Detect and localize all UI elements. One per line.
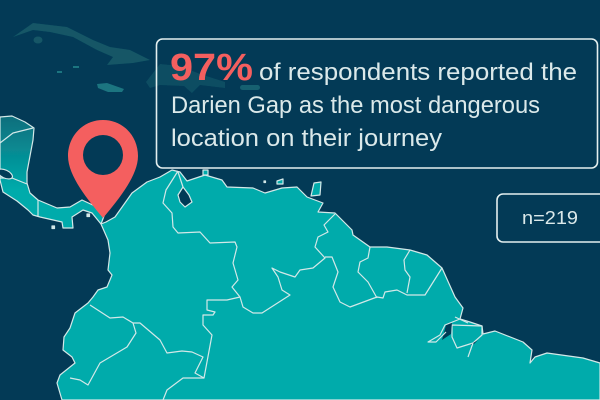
map: continent outline — [57, 170, 600, 400]
map: Caribbean islands — [13, 23, 260, 93]
callout text: location on their journey — [171, 125, 442, 152]
callout text: Darien Gap as the most dangerous — [171, 92, 540, 119]
sample size label: n=219 — [522, 208, 578, 228]
map: Lake Maracaibo — [178, 187, 192, 207]
map: Central America — [0, 116, 104, 228]
map: South America — [0, 116, 600, 400]
headline stat: 97% — [170, 47, 253, 89]
icon: map pin on Darien Gap — [68, 120, 138, 218]
callout box — [156, 39, 598, 168]
map: Trinidad and coast islands — [311, 182, 321, 196]
callout text: of respondents reported the — [259, 59, 577, 86]
callout text — [171, 59, 577, 152]
sample size box — [497, 194, 600, 242]
map: Amazon delta — [452, 325, 482, 348]
map: country borders — [163, 171, 335, 313]
